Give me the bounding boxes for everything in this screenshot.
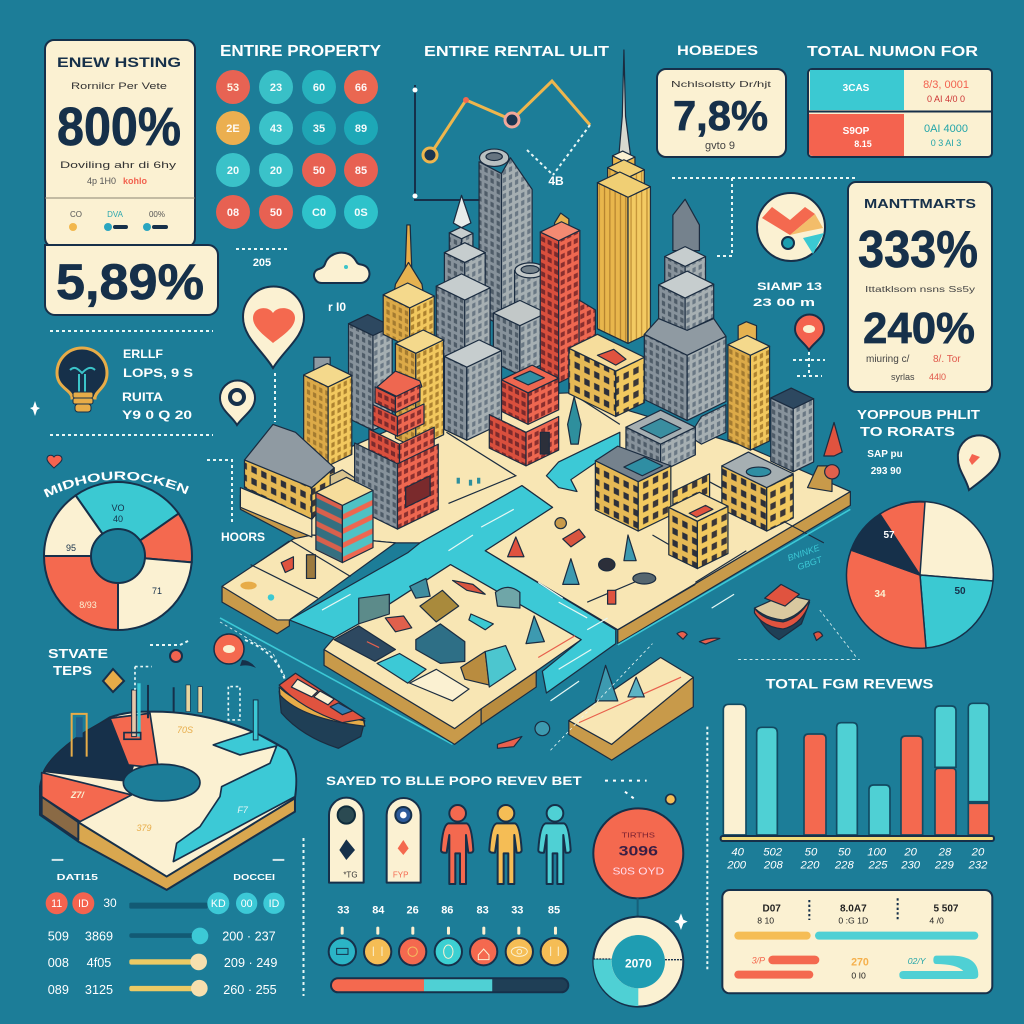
icon: red pin [793,314,825,376]
row one: ID [78,898,89,910]
header labels [52,859,284,882]
panel: percent stats card: miuring c/ [866,354,910,365]
icon: cloud [314,253,369,314]
platform: left strip [222,535,395,634]
numbers row [337,904,560,916]
callout: red circle: 3096 [619,843,658,859]
map pie poles [72,667,258,757]
panel: percent stats card: 8/. Tor [933,354,961,365]
panel: range card: 270 [851,956,869,968]
building: gray low row [626,410,695,472]
icon: small heart [47,455,62,468]
row one: 00 [241,898,253,910]
row three [129,954,207,970]
row one [46,892,285,914]
panel: range card [722,890,992,993]
building: yellow low row [595,446,710,531]
panel: big percent card [45,245,218,315]
numbers row: 26 [407,904,419,916]
isometric city [220,50,860,760]
heading: curved donut title: MIDHOUROCKEN [44,472,189,498]
building: red tower [540,213,595,383]
bar labels: 229 [934,859,954,871]
panel: range card: 8 10 [757,915,774,925]
text block: bulb notes: ERLLF [123,347,163,361]
ground: upper platform [240,393,850,644]
panel: percent stats card: 240% [863,304,975,353]
bar labels: 40 [731,847,745,859]
icon: location pin [220,380,255,425]
bar labels: 225 [868,859,888,871]
building: multicolor [316,470,373,563]
building: yellow spire tower [597,50,650,343]
icon: mini pie [757,193,825,261]
panel: 7,8% card [657,69,786,157]
map pie labels: 70S [177,725,193,735]
heading: yoppoub [857,407,980,477]
panel: new listing card: 00% [149,210,165,219]
bar labels [726,847,988,871]
heading: yoppoub: 293 90 [871,466,902,477]
row values: 509 [48,930,69,944]
numbers row: 84 [372,904,385,916]
platform: lower block [324,565,581,744]
building: back gray tower [479,149,532,338]
heading: TOTAL FGM REVEWS [766,676,933,691]
row two [129,928,208,944]
panel: range card: D07 [762,903,781,914]
panel: percent stats card: 333% [858,221,978,279]
bar labels: 232 [968,859,988,871]
details: park props [448,422,842,604]
platform: small right [569,657,693,760]
header labels: DOCCEI [233,872,275,882]
circle number grid: 2E [226,123,240,135]
tag: one: *TG [343,870,358,879]
donut chart: left: 95 [66,543,76,553]
section: reviews bars [707,676,994,993]
panel: new listing card: ENEW HSTING [57,54,181,70]
row values [48,930,277,997]
panel: new listing card: 4p 1H0 [87,176,116,186]
building: yellow right block [722,452,793,531]
text: map tag: BNINKE [786,543,821,563]
building: gray spire tower [436,195,502,440]
icon: red marker [150,634,285,680]
text: siamp [753,281,822,309]
donut chart: left: 71 [152,586,162,596]
building: yellow front left [304,357,352,466]
building: yellow small block [669,492,728,569]
bar labels: 20 [971,847,985,859]
pie chart: right: 34 [874,589,886,600]
panel: 7,8% card: gvto 9 [705,140,735,152]
tag: one [329,798,364,883]
map pie labels [70,725,249,833]
person: teal [538,805,571,884]
text block: bulb notes: RUITA [122,390,163,404]
boat: right [754,584,810,640]
circle number grid: 60 [313,82,325,94]
panel: comparison table: 8/3, 0001 [923,79,969,91]
pie chart: right: 50 [954,586,966,597]
bar labels: 220 [800,859,820,871]
tag: two: FYP [393,870,408,879]
circle number grid: 20 [270,165,282,177]
panel: new listing card [45,40,195,247]
text block: bulb notes: LOPS, 9 S [123,366,193,380]
medal row [329,927,568,965]
row values: 089 [48,983,69,997]
building: yellow left tower [383,225,444,448]
header labels: DATI15 [57,872,99,882]
tag: two [387,798,421,883]
panel: new listing card: 800% [57,97,181,157]
numbers row: 33 [337,904,349,916]
bar chart [721,703,994,841]
text block: bulb notes: Y9 0 Q 20 [122,408,192,422]
circle number grid: 89 [355,123,367,135]
heading: total number: TOTAL NUMON FOR [807,43,978,60]
panel: comparison table: S9OP [843,126,870,137]
panel: big percent card: 5,89% [56,254,204,310]
details: small markers [497,632,823,748]
panel: range card: 02/Y [908,956,927,966]
panel: percent stats card: syrlas [891,372,915,382]
panel: percent stats card: MANTTMARTS [864,196,976,211]
callout: red circle [593,808,683,898]
heading: yoppoub: TO RORATS [860,424,955,439]
panel: comparison table: 3CAS [843,83,870,94]
panel: new listing card: Doviling ahr di 6hy [60,160,176,171]
donut chart: left: VO [111,503,125,513]
row values: 260 · 255 [223,983,277,997]
row one: 30 [103,896,117,910]
building: red mid block [489,365,559,466]
building: red stepped [355,371,438,529]
row values: 3869 [85,930,113,944]
panel: range card: 8.0A7 [840,903,867,914]
numbers row: 86 [441,904,453,916]
donut chart: left: 40 [113,514,123,524]
panel: range card: 0 :G 1D [838,915,868,925]
panel: range card: 0 I0 [851,971,866,981]
numbers row: 83 [477,904,489,916]
heading: state tops [48,646,108,678]
heading: entire property: ENTIRE PROPERTY [220,43,381,60]
panel: new listing card: kohlo [123,176,148,186]
map pie: state share [40,667,296,890]
text: siamp: SIAMP 13 [757,281,822,293]
panel: comparison table: 0 AI 4/0 0 [927,94,965,104]
circle number grid: 23 [270,82,282,94]
panel: new listing card: Rornilcr Per Vete [71,81,167,91]
river [220,432,850,744]
building: gray cylinder [493,263,546,375]
bar labels: 208 [763,859,783,871]
map pie labels: F7 [237,805,249,815]
row one: ID [269,898,280,910]
row values: 3125 [85,983,113,997]
small label 205: 205 [253,257,271,269]
panel: 7,8% card: 7,8% [673,92,768,139]
row one: KD [211,898,226,910]
heading: state tops: STVATE [48,646,108,661]
icon: diamond [103,669,124,692]
panel: new listing card: CO [70,210,82,219]
row four [129,980,208,997]
tree: center [568,397,581,444]
row values: 209 · 249 [224,956,277,970]
text: siamp: 23 00 m [753,297,815,309]
bar labels: 502 [763,847,783,859]
building: low yellow block [569,334,644,416]
circle number grid: 66 [355,82,367,94]
panel: comparison table: 8.15 [854,139,872,149]
text: map tag: GBGT [796,554,824,572]
circle number grid: 35 [313,123,325,135]
circle number grid: 50 [270,207,282,219]
circle number grid: C0 [312,207,326,219]
row values: 200 · 237 [222,930,276,944]
panel: new listing card: DVA [107,210,124,219]
panel: comparison table [808,69,992,157]
bar labels: 28 [938,847,952,859]
panel: comparison table: 0AI 4000 [924,123,968,135]
bar labels: 230 [900,859,921,871]
line chart [412,81,590,200]
row one: 11 [51,898,62,910]
map pie labels: 379 [136,823,151,833]
circle number grid: 0S [354,207,368,219]
numbers row: 33 [511,904,523,916]
connector: dotted [672,178,855,256]
heading: hobedes: HOBEDES [677,42,758,58]
panel: range card: 4 /0 [929,915,944,925]
circle number grid: 85 [355,165,367,177]
label: hoors: HOORS [221,530,265,544]
donut chart: left [44,482,192,630]
heading: entire rental: ENTIRE RENTAL ULIT [424,43,609,60]
panel: percent stats card: 44l0 [929,372,946,382]
bar labels: 50 [805,847,818,859]
text: map tag [786,543,825,574]
connector below heart pin [274,373,276,422]
donut: 2070 [593,917,683,1007]
panel: percent stats card: Ittatklsom nsns Ss5y [865,285,975,294]
circle number grid: 50 [313,165,325,177]
map pie labels: Z7/ [70,790,85,800]
icon: cream pin [958,435,1000,490]
divider: bottom-left vertical [302,838,304,996]
building: small gray right [771,388,814,472]
callout: red circle: S0S OYD [612,866,664,877]
heading: yoppoub: SAP pu [867,449,903,460]
panel: percent stats card [848,182,992,392]
segmented bar [331,978,569,992]
boat: lower left [279,673,365,748]
bar labels: 228 [834,859,854,871]
building: yellow tall right [728,322,770,450]
section: reviews icons [326,774,688,1007]
numbers row: 85 [548,904,560,916]
circle number grid [216,70,378,229]
callout: red circle: TIRTHS [622,831,655,840]
person: red [441,805,473,884]
label: hoors [207,460,265,544]
table: date rows [46,859,285,997]
building: gray left [349,315,392,430]
building: gray right tower [644,199,726,444]
icon: heart pin [243,286,304,368]
building: tan house [240,424,334,537]
icon: cloud: r I0 [328,300,346,314]
circle number grid: 08 [227,207,239,219]
text block: bulb notes [122,347,193,422]
heading: state tops: TEPS [53,663,92,678]
panel: comparison table: 0 3 AI 3 [931,138,961,148]
panel: range card: 5 507 [933,903,959,914]
circle number grid: 20 [227,165,239,177]
bar labels: 200 [726,859,747,871]
panel: 7,8% card: Nchlsolstty Dr/hjt [671,80,772,89]
bar labels: 50 [838,847,851,859]
donut: 2070: 2070 [625,957,652,971]
sparkle and dot [605,781,688,930]
circle number grid: 43 [270,123,282,135]
donut chart: left: 8/93 [79,600,97,610]
small label 205 [236,249,290,269]
person: yellow [489,805,522,884]
pie chart: right [846,501,993,648]
panel: range card: 3/P [752,955,765,965]
pie chart: right: 57 [883,530,895,541]
circle number grid: 53 [227,82,239,94]
heading: SAYED TO BLLE POPO REVEV BET [326,774,582,788]
row values: 4f05 [87,956,111,970]
row values: 008 [48,956,69,970]
line chart: 4B [548,174,564,188]
sparkle [30,401,40,416]
bar labels: 20 [903,847,918,859]
icon: light bulb [57,348,107,412]
heading: yoppoub: YOPPOUB PHLIT [857,407,980,422]
bar labels: 100 [867,847,887,859]
